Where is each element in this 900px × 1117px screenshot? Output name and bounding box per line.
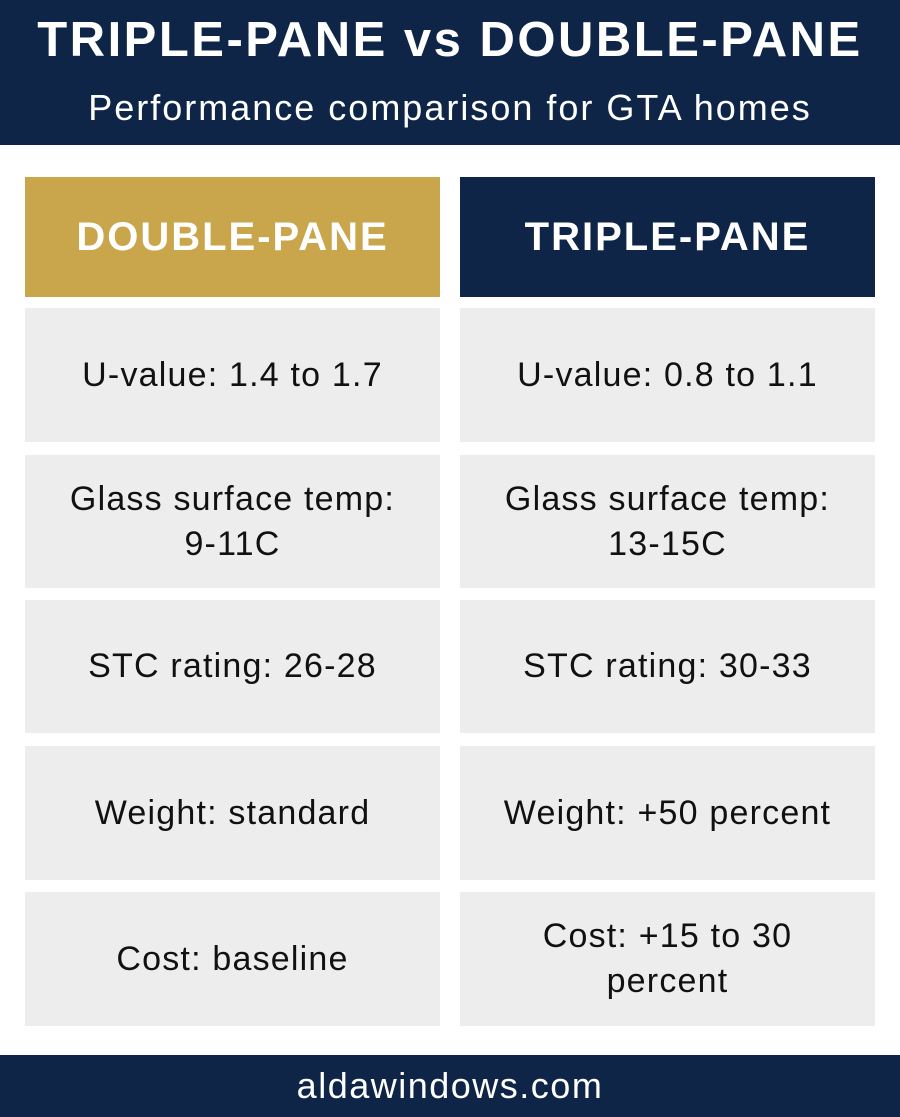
row: cost triple bbox=[460, 892, 875, 1026]
column header: triple-pane: TRIPLE-PANE bbox=[525, 214, 810, 258]
row: stc double: STC rating: 26-28 bbox=[88, 647, 377, 685]
row: glass temp triple: Glass surface temp: bbox=[505, 480, 830, 518]
column header: double-pane: DOUBLE-PANE bbox=[76, 214, 389, 258]
row: stc double bbox=[25, 600, 440, 733]
row: glass temp double bbox=[25, 455, 440, 588]
footer: aldawindows.com bbox=[297, 1065, 603, 1106]
title: TRIPLE-PANE vs DOUBLE-PANE bbox=[37, 13, 863, 67]
row: weight triple: Weight: +50 percent bbox=[504, 794, 831, 832]
row: weight double bbox=[25, 746, 440, 880]
row: glass temp triple: 13-15C bbox=[608, 524, 727, 562]
subtitle: Performance comparison for GTA homes bbox=[88, 87, 812, 128]
row: cost triple: Cost: +15 to 30 bbox=[543, 917, 792, 955]
row: u-value double: U-value: 1.4 to 1.7 bbox=[82, 356, 383, 394]
column header: triple-pane bbox=[460, 177, 875, 297]
row: cost double: Cost: baseline bbox=[116, 940, 349, 978]
row: glass temp double: Glass surface temp: bbox=[70, 480, 395, 518]
row: cost double bbox=[25, 892, 440, 1026]
row: weight triple bbox=[460, 746, 875, 880]
row: weight double: Weight: standard bbox=[95, 794, 370, 832]
row: stc triple: STC rating: 30-33 bbox=[523, 647, 812, 685]
footer bbox=[0, 1055, 900, 1117]
row: stc triple bbox=[460, 600, 875, 733]
row: u-value double bbox=[25, 308, 440, 442]
row: glass temp double: 9-11C bbox=[184, 524, 281, 562]
header banner bbox=[0, 0, 900, 145]
row: u-value triple bbox=[460, 308, 875, 442]
row: cost triple: percent bbox=[607, 962, 728, 1000]
row: u-value triple: U-value: 0.8 to 1.1 bbox=[517, 356, 818, 394]
row: glass temp triple bbox=[460, 455, 875, 588]
column header: double-pane bbox=[25, 177, 440, 297]
